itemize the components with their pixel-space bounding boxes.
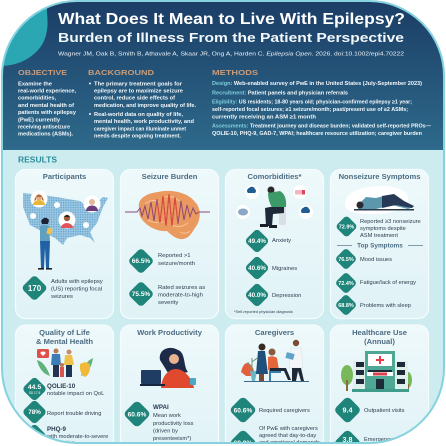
stat: 72.9%: Reported ≥3 nonseizure (360, 219, 421, 225)
panel: methods: Assessments: Treatment journey and disease burden; validated self-reported PROs— (212, 124, 432, 130)
panel: objective (18, 68, 77, 138)
stat: migraines: 40.6% (248, 265, 266, 272)
panel: background: Real-world data on quality of life, (94, 112, 183, 118)
panel: healthcare use: Healthcare Use (352, 328, 407, 337)
panel: comorbidities: Comorbidities* (247, 172, 302, 181)
stat: 66.5%: 66.5% (132, 258, 150, 265)
panel: work productivity (120, 325, 218, 446)
panel: methods (212, 68, 432, 137)
stat: WPAI (123, 400, 194, 442)
icon: researcher with clipboard (38, 218, 53, 270)
stat: 72.9%: 72.9% (339, 224, 354, 230)
stat: 72.9% (336, 216, 420, 237)
stat: 66.5% (129, 249, 195, 273)
citation: Wagner JM, Oak B, Smith B, Athavale A, Skaar JR, Ong A, Harden C. Epilepsia Open. 2026. doi:10.1002/epi4.70222 (58, 52, 404, 58)
stat: trouble driving: Report trouble driving (47, 411, 101, 417)
panel: healthcare use: (Annual) (364, 337, 395, 346)
stat: mood issues: Mood issues (360, 257, 392, 263)
stat: caregiver demands (229, 426, 320, 446)
panel: nonseizure symptoms: Nonseizure Symptoms (339, 172, 420, 181)
stat: fatigue: Fatigue/lack of energy (360, 280, 416, 286)
stat: 75.5%: Rated seizures as (158, 285, 205, 291)
stat: WPAI: productivity loss (153, 421, 194, 427)
panel: seizure burden (120, 170, 218, 318)
panel: objective: OBJECTIVE (18, 68, 67, 77)
panel: objective: real-world experience, (18, 88, 76, 94)
stat: 72.9%: symptoms despite (360, 226, 406, 232)
icon: hospital (341, 351, 412, 392)
stat: sleep: 68.8% (338, 303, 354, 309)
stat: QOLIE-10: QOLIE-10 (47, 383, 76, 390)
stat: PHQ-9 (31, 424, 108, 442)
stat: WPAI: 60.6% (128, 411, 146, 418)
icon: teal corner accent (4, 8, 48, 66)
icon: brain with EEG wave (125, 191, 210, 239)
stat: 75.5%: 75.5% (132, 291, 150, 298)
panel: background: epilepsy are to maximize seizure (94, 88, 183, 94)
stat: WPAI: (driven by (153, 428, 178, 434)
stat: fatigue (336, 273, 416, 293)
panel: objective: patients with epilepsy (18, 110, 77, 116)
stat: depression (246, 284, 301, 306)
stat: caregiver demands: Of PwE with caregivers (259, 426, 318, 432)
stat: outpatient visits: 9.4 (342, 406, 352, 414)
panel: caregivers: Caregivers (255, 328, 294, 337)
panel: background: control, reduce side effects of (94, 96, 175, 102)
panel: background (88, 68, 196, 140)
stat: migraines: Migraines (272, 266, 297, 272)
stat: caregiver demands: agreed that day-to-day (259, 433, 316, 439)
panel: background: mental health, work productivity, and (94, 119, 195, 125)
panel: caregivers (226, 325, 324, 446)
stat: outpatient visits (333, 396, 405, 424)
icon: person lying down (345, 186, 414, 214)
stat: outpatient visits: Outpatient visits (364, 408, 405, 414)
map of United States (23, 190, 108, 245)
icon: seated distressed person (236, 185, 313, 228)
stat: emergency visits (333, 429, 393, 446)
panel: background: The primary treatment goals for (94, 81, 183, 87)
panel: nonseizure symptoms (330, 170, 428, 318)
panel: quality of life: Quality of Life (39, 328, 90, 337)
panel: background: needs despite ongoing treatment. (94, 134, 181, 140)
stat: QOLIE-10: notable impact on QoL (47, 391, 104, 397)
panel: methods: QOLIE-10, PHQ-9, GAD-7, WPAI; healthcare resource utilization; caregiver burden (212, 131, 422, 137)
panel: objective: receiving antiseizure (18, 124, 70, 130)
stat: emergency visits: 3.8 (342, 435, 352, 444)
stat: required caregivers: Required caregivers (259, 408, 310, 414)
stat: 170 adults (22, 276, 103, 300)
title: What Does It Mean to Live With Epilepsy? (58, 11, 405, 28)
panel: seizure burden: Seizure Burden (142, 172, 198, 181)
stat: WPAI: WPAI (153, 404, 169, 411)
stat: 66.5%: seizure/month (158, 261, 195, 267)
stat: caregiver demands: and emotional demands (259, 440, 320, 446)
stat: mood issues (336, 249, 392, 269)
footnote: *Self-reported physician diagnosis (234, 309, 293, 314)
panel: quality of life (16, 325, 114, 446)
stat: depression: 40.0% (248, 292, 266, 299)
stat: WPAI: Mean work (153, 413, 181, 419)
panel: objective: and mental health of (18, 103, 74, 109)
stat: 170 adults: Adults with epilepsy (51, 279, 103, 285)
stat: trouble driving (23, 400, 102, 424)
stat: anxiety (246, 230, 291, 252)
stat: 75.5% (129, 282, 205, 306)
stat: migraines (246, 256, 297, 280)
stat: sleep: Problems with sleep (360, 303, 411, 309)
panel: background: BACKGROUND (88, 68, 155, 77)
stat: 170 adults: (US) reporting focal (51, 286, 102, 292)
panel: objective: comorbidities, (18, 96, 56, 102)
header band (0, 0, 446, 150)
icon: woman at laptop (140, 348, 196, 388)
panel: participants: Participants (43, 172, 86, 181)
stat: 170 adults: seizures (51, 294, 73, 300)
stat: anxiety: 49.4% (248, 238, 266, 245)
stat: 66.5%: Reported >1 (158, 253, 191, 259)
panel: objective: medications (ASMs). (18, 132, 73, 138)
panel: healthcare use (330, 325, 428, 446)
panel: work productivity: Work Productivity (137, 328, 203, 337)
panel: background: caregiver impact can illuminate unmet (94, 126, 186, 132)
panel: comorbidities (226, 170, 324, 318)
panel: methods: self-reported focal seizures; ≥1 seizure/month; past/present use of ≥2 ASMs; (212, 107, 408, 113)
stat: PHQ-9: with moderate-to-severe (46, 434, 108, 440)
stat: depression: Depression (272, 293, 301, 299)
results heading: RESULTS (18, 156, 57, 165)
stat: 170 adults: 170 (28, 284, 42, 293)
panel: methods: METHODS (212, 68, 258, 77)
stat: required caregivers (229, 396, 310, 424)
panel: quality of life: & Mental Health (36, 337, 93, 346)
stat: mood issues: 76.5% (338, 257, 354, 263)
stat: fatigue: 72.4% (338, 281, 354, 287)
panel: participants (16, 170, 114, 318)
subheading: top symptoms: Top Symptoms (357, 242, 403, 250)
stat: WPAI: presenteeism*) (153, 436, 191, 442)
panel: objective: (PwE) currently (18, 117, 61, 123)
stat: 75.5%: moderate-to-high (158, 292, 203, 298)
stat: QOLIE-10 (23, 378, 104, 400)
panel: methods: currently receiving an ASM ≥1 month (212, 115, 316, 121)
stat: emergency visits: Emergency (364, 437, 393, 443)
stat: sleep (336, 295, 411, 315)
icon: family with shield (37, 348, 93, 377)
stat: PHQ-9: PHQ-9 (47, 426, 66, 433)
panel: objective: Examine the (18, 81, 52, 87)
subtitle: Burden of Illness From the Patient Perspective (58, 30, 404, 45)
stat: QOLIE-10: SD 17.5 (29, 391, 40, 395)
stat: 72.9%: ASM treatment (360, 233, 398, 239)
panel: methods: Eligibility: US residents; 18-80 years old; physician-confirmed epilepsy ≥1 year; (212, 100, 412, 106)
stat: anxiety: Anxiety (272, 238, 291, 244)
stat: 75.5%: severity (158, 300, 178, 306)
icon: caregiver scene (241, 340, 309, 382)
stat: required caregivers: 60.6% (234, 407, 252, 414)
stat: QOLIE-10: 44.5 (28, 384, 41, 391)
subheading: top symptoms (337, 243, 423, 249)
panel: background: medication, and improve quality of life. (94, 103, 196, 109)
panel: methods: Design: Web-enabled survey of PwE in the United States (July-September 2023) (212, 81, 422, 87)
panel: methods: Recruitment: Patient panels and physician referrals (212, 91, 348, 97)
stat: trouble driving: 78% (28, 409, 41, 416)
